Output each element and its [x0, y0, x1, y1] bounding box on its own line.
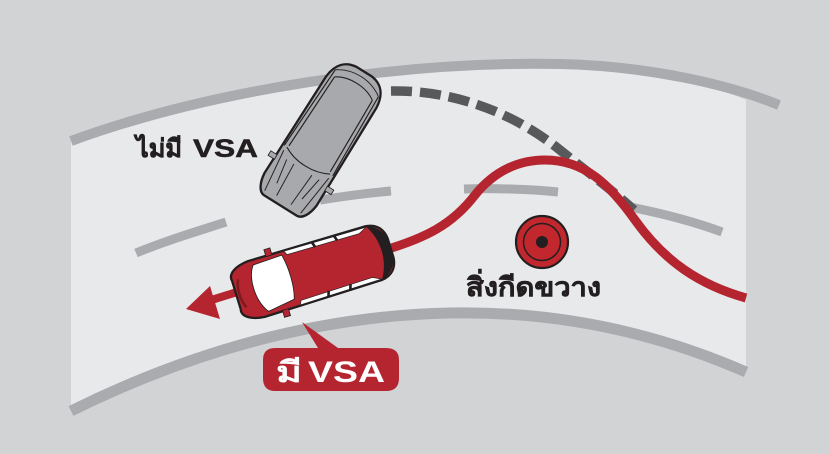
- label: obstacle: สิ่งกีดขวาง: [466, 268, 601, 302]
- rear bumper: [365, 221, 399, 280]
- skid path without VSA (dashed): [391, 91, 634, 210]
- road bottom edge band: [71, 313, 746, 411]
- red car with VSA: [226, 214, 401, 329]
- direction arrow: [186, 286, 250, 319]
- road surface: [71, 64, 779, 411]
- callout: with VSA: มี: [276, 357, 302, 389]
- red path with VSA: [385, 160, 746, 298]
- road top edge band: [71, 64, 779, 141]
- label: no VSA: [133, 133, 258, 163]
- obstacle: [516, 216, 568, 268]
- callout: with VSA: [263, 322, 399, 391]
- label: no VSA: ไม่มี: [133, 133, 182, 163]
- side windows: [284, 226, 367, 256]
- grey car without VSA: [249, 52, 396, 225]
- mirrors: [264, 248, 272, 257]
- lane dashes: [136, 189, 722, 253]
- windshield: [247, 254, 299, 314]
- label: no VSA: VSA: [193, 135, 258, 163]
- callout: with VSA: VSA: [308, 356, 385, 389]
